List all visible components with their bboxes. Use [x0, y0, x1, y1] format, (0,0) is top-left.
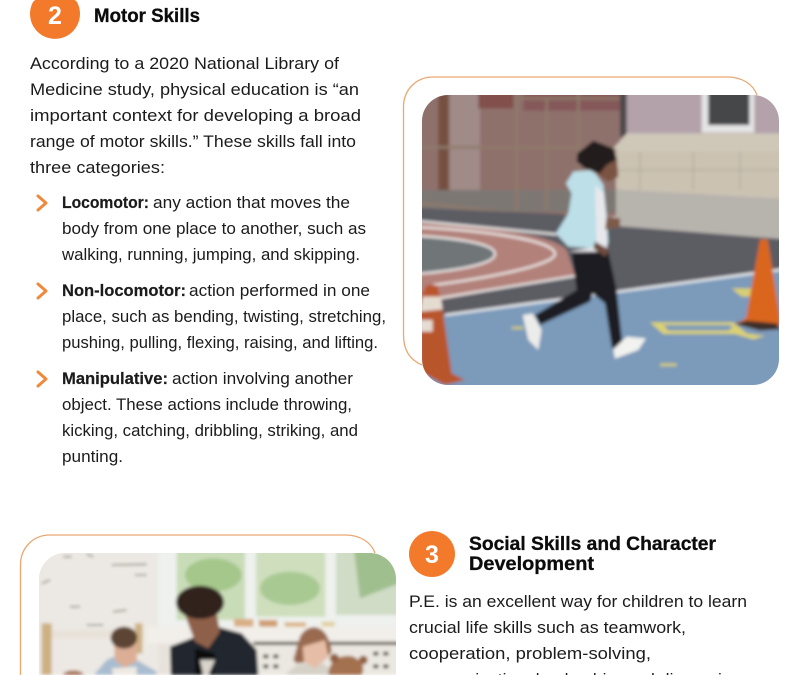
bullet: manipulative: kicking, catching, dribbling, striking, and: [62, 422, 358, 440]
blue court: [422, 270, 779, 385]
bullet: manipulative: punting.: [62, 448, 123, 466]
bullet: manipulative: [38, 370, 358, 466]
heading: Motor Skills: Motor Skills: [94, 5, 200, 27]
bullet: locomotor: body from one place to another, such as: [62, 220, 366, 238]
intro paragraph: [30, 54, 361, 177]
social skills paragraph: P.E. is an excellent way for children to learn: [409, 592, 747, 611]
girl: [285, 662, 330, 675]
head and hair: [590, 156, 620, 182]
social skills paragraph: cooperation, problem-solving,: [409, 644, 651, 663]
left cone: [420, 285, 465, 385]
photo: teacher with children: [39, 553, 396, 675]
social skills paragraph: crucial life skills such as teamwork,: [409, 618, 686, 637]
heading: social skills: [469, 533, 716, 575]
bullet: non-locomotor: pushing, pulling, flexing, raising, and lifting.: [62, 334, 378, 352]
bullet: locomotor: walking, running, jumping, and skipping.: [61, 246, 360, 264]
small child: [328, 656, 363, 675]
window: [158, 538, 412, 628]
building wall: [627, 83, 793, 137]
number badge 2: 2: [48, 2, 62, 30]
heading: social skills: Development: [469, 553, 595, 575]
intro paragraph: three categories:: [30, 158, 165, 177]
bullet: manipulative: action involving another: [172, 370, 354, 388]
items on sill: [233, 619, 253, 628]
social skills paragraph: [409, 592, 747, 663]
jacket: [556, 170, 608, 248]
small head at left edge: [63, 670, 84, 675]
intro paragraph: important context for developing a broad: [30, 106, 361, 125]
photo frame outline: classroom photo: [20, 535, 375, 675]
shoes: [523, 313, 542, 350]
bullet: non-locomotor: [38, 282, 386, 352]
asphalt: [422, 208, 779, 317]
teacher: [170, 627, 258, 675]
bullet: manipulative: object. These actions include throwing,: [62, 396, 352, 414]
intro paragraph: According to a 2020 National Library of: [30, 54, 339, 73]
intro paragraph: range of motor skills.” These skills fall into: [30, 132, 356, 151]
bullet: manipulative: Manipulative:: [62, 370, 168, 388]
bullet: locomotor: [38, 194, 366, 264]
brick wall behind fence: [422, 95, 625, 219]
white brick wall: [39, 553, 159, 675]
yellow markings: [650, 322, 765, 339]
bullet: non-locomotor: place, such as bending, twisting, stretching,: [62, 308, 386, 326]
right cone: [735, 239, 780, 331]
number badge 3: [409, 531, 455, 577]
girl legs: [535, 252, 623, 348]
number badge 2: [30, 0, 80, 39]
boy: [95, 657, 157, 675]
red track: [407, 222, 575, 300]
stone wall: [613, 148, 779, 200]
intro paragraph: Medicine study, physical education is “an: [30, 80, 359, 99]
photo: girl running on playground: [422, 95, 779, 385]
radiator cover: [168, 642, 412, 675]
panel: social skills and character development: [409, 531, 747, 663]
heading: social skills: Social Skills and Character: [469, 533, 716, 555]
number badge 3: 3: [425, 541, 439, 569]
sill: [147, 627, 413, 643]
bullet: non-locomotor: action performed in one: [189, 282, 370, 300]
bullet: non-locomotor: Non-locomotor:: [62, 282, 186, 300]
panel: motor skills: [30, 0, 386, 466]
bullet: locomotor: Locomotor:: [62, 194, 149, 212]
bullet: locomotor: any action that moves the: [153, 194, 350, 212]
photo frame outline: running photo: [404, 77, 757, 365]
